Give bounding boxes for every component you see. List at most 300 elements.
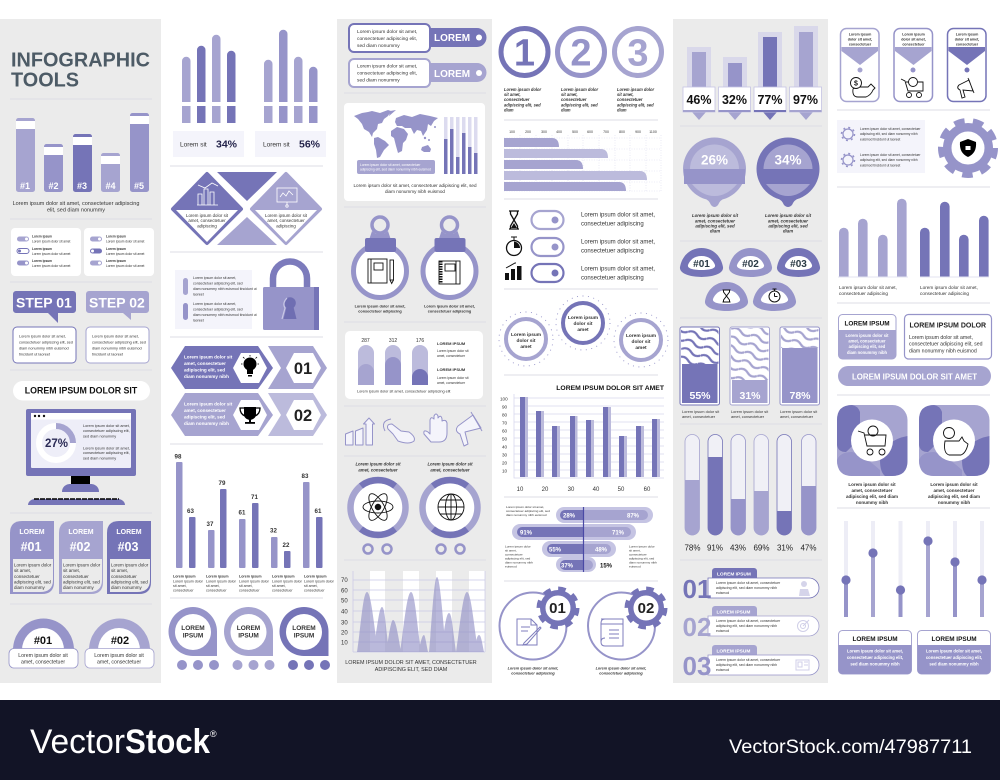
panel: toggle list right bbox=[84, 228, 154, 276]
text card with gears: Lorem ipsum dolor sit amet, consectetuer bbox=[860, 153, 921, 157]
list item 01: LOREM IPSUM bbox=[717, 572, 751, 578]
chart: vertical bars with heading: 60 bbox=[644, 487, 651, 493]
panel: three column chart bbox=[345, 331, 483, 399]
chart: horizontal bars: 800 bbox=[619, 130, 625, 134]
wave box 78%: 78% bbox=[789, 390, 811, 402]
card: lorem ipsum right: Lorem ipsum dolor sit amet, bbox=[926, 648, 982, 654]
balloon gauge 26% bbox=[683, 138, 746, 234]
list item 02 bbox=[682, 606, 819, 642]
tag card: shopping cart: Lorem ipsum bbox=[902, 32, 925, 36]
chart: horizontal bars bbox=[504, 130, 661, 191]
wave box 55%: 55% bbox=[689, 390, 711, 402]
icon: piggy coin bbox=[944, 428, 968, 455]
footer logo bbox=[30, 723, 217, 761]
wave box 78%: Lorem ipsum dolor sit bbox=[780, 409, 818, 414]
panel: toggle list left bbox=[11, 228, 81, 276]
label box 2 bbox=[349, 59, 486, 87]
percentage bars: 32% bbox=[722, 93, 747, 107]
card: lorem ipsum dolor: consectetuer adipiscing elit, sed bbox=[909, 342, 983, 348]
funnel chart bbox=[505, 505, 657, 572]
card: lorem ipsum small: amet, consectetuer bbox=[848, 338, 886, 344]
tag card: megaphone: consectetuer bbox=[956, 42, 979, 46]
text card with gears: adipiscing elit, sed diam nonummy nibh bbox=[860, 132, 918, 136]
numbered circles: adipiscing elit, sed bbox=[561, 102, 598, 108]
dotted circle labels: amet bbox=[635, 345, 647, 351]
icon: globe bbox=[438, 494, 464, 520]
funnel chart: 28% bbox=[563, 514, 576, 520]
tag card: megaphone bbox=[948, 28, 986, 102]
dotted circle labels: Lorem ipsum bbox=[626, 333, 656, 339]
clip badge: spiral notebook: Lorem ipsum dolor sit amet, bbox=[424, 304, 475, 308]
icon: presentation board bbox=[277, 188, 297, 207]
funnel chart: 87% bbox=[627, 514, 640, 520]
numbered circles: adipiscing elit, sed bbox=[617, 102, 654, 108]
panel: toggle list right: Lorem ipsum bbox=[106, 247, 126, 251]
panel: column 6 bbox=[837, 28, 995, 674]
wave box 31%: Lorem ipsum dolor sit bbox=[731, 409, 769, 414]
card: #03: Lorem ipsum dolor bbox=[111, 562, 149, 568]
icon: light bulb bbox=[241, 355, 259, 376]
list item 02: 02 bbox=[682, 612, 711, 642]
percentage bars: 46% bbox=[686, 93, 712, 107]
hexagon row 01: amet, consectetuer bbox=[184, 361, 226, 366]
numbered circles: diam bbox=[504, 108, 514, 112]
gear step 02: Lorem ipsum dolor sit amet, bbox=[596, 666, 646, 670]
title bbox=[11, 48, 150, 92]
monitor with donut: consectetuer adipiscing elit, bbox=[83, 429, 130, 433]
chart: grouped bars: 37 bbox=[207, 521, 214, 528]
callout: step 01 bbox=[13, 291, 76, 363]
donut: globe: Lorem ipsum dolor sit bbox=[427, 462, 473, 466]
panel: toggle list right: Lorem ipsum dolor sit amet bbox=[106, 240, 145, 244]
app tile: piggy: nonummy nibh bbox=[938, 500, 970, 505]
hexagon row 02: Lorem ipsum dolor sit bbox=[184, 402, 233, 406]
world map bbox=[354, 110, 438, 158]
card: #02: LOREM bbox=[68, 529, 94, 536]
clip badge: notebook and pencil: Lorem ipsum dolor sit amet, bbox=[355, 304, 405, 308]
app tile: piggy bbox=[919, 405, 990, 505]
text card beside padlock: consectetuer adipiscing elit, sed bbox=[193, 308, 243, 312]
chart: rounded bars dark: Lorem ipsum dolor sit amet, bbox=[920, 285, 978, 290]
funnel chart: diam nonummy nibh bbox=[505, 560, 533, 564]
funnel chart: 55% bbox=[549, 548, 562, 554]
chart: vertical bars with heading: 90 bbox=[502, 404, 508, 410]
chart: grouped bars: 71 bbox=[251, 494, 258, 501]
card: lorem ipsum small bbox=[838, 314, 896, 359]
balloon gauge 34% bbox=[756, 138, 820, 234]
balloon gauge 26%: 26% bbox=[701, 152, 728, 168]
text card beside padlock: Lorem ipsum dolor sit amet, bbox=[193, 276, 236, 280]
text card beside padlock: Lorem ipsum dolor sit amet, bbox=[193, 302, 236, 306]
callout: step 01: tincidunt ut laoreet bbox=[19, 352, 51, 356]
monitor with donut: consectetuer adipiscing elit, bbox=[83, 451, 130, 455]
diamond group: adipiscing bbox=[197, 224, 217, 228]
funnel chart: 71% bbox=[612, 530, 625, 536]
monitor with donut: sed diam nonummy bbox=[83, 456, 116, 460]
card: lorem ipsum right bbox=[918, 630, 990, 674]
gear step 01: consectetuer adipiscing bbox=[511, 672, 555, 676]
label box 2: LOREM bbox=[434, 69, 470, 80]
chart: cylinder bars bbox=[16, 113, 149, 192]
label box 1: consectetuer adipiscing elit, bbox=[357, 36, 417, 42]
card: lorem ipsum small: LOREM IPSUM bbox=[844, 320, 890, 328]
panel: three column chart: LOREM IPSUM bbox=[437, 367, 466, 372]
numbered circles: diam bbox=[561, 108, 571, 112]
chart: grouped bars: Lorem ipsum bbox=[206, 574, 229, 578]
card: #02 bbox=[59, 521, 103, 594]
chart: grouped bars: Lorem ipsum dolor bbox=[272, 580, 303, 584]
tag card: shopping cart bbox=[894, 28, 932, 102]
balloon gauge 34%: amet, consectetuer bbox=[768, 218, 808, 224]
monitor with donut: Lorem ipsum dolor sit amet, bbox=[83, 446, 130, 450]
donut: atom: Lorem ipsum dolor sit bbox=[355, 462, 401, 466]
chart: grouped bars: consectetuer bbox=[173, 588, 194, 592]
chart: grouped bars: Lorem ipsum dolor bbox=[206, 580, 237, 584]
wave box 31%: 31% bbox=[739, 390, 761, 402]
wave box 55% bbox=[680, 327, 720, 419]
numbered circles: sit amet, bbox=[561, 92, 578, 97]
funnel chart: sit amet, bbox=[505, 548, 517, 552]
list item 03: LOREM IPSUM bbox=[716, 648, 750, 654]
panel: toggle list right: Lorem ipsum bbox=[106, 259, 126, 263]
hexagon row 02: 02 bbox=[294, 407, 312, 425]
toggle row: growth bars: Lorem ipsum dolor sit amet, bbox=[581, 266, 655, 272]
list item 01 bbox=[682, 568, 819, 604]
dotted circle labels: dolor sit bbox=[632, 339, 651, 345]
wave box 78% bbox=[780, 327, 820, 419]
chart: grouped bars: Lorem ipsum bbox=[239, 574, 262, 578]
list item 01: 01 bbox=[682, 574, 711, 604]
chart: area peaks bbox=[341, 571, 485, 673]
icon: megaphone outline bbox=[958, 78, 974, 98]
text card beside padlock: consectetuer adipiscing elit, sed bbox=[193, 282, 243, 286]
funnel chart: diam nonummy nibh euismod bbox=[506, 513, 547, 517]
numbered circles: sit amet, bbox=[617, 92, 634, 97]
text block: diam nonummy nibh euismod bbox=[385, 189, 445, 194]
list item 03: adipiscing elit, sed diam nonummy nibh bbox=[716, 663, 777, 667]
chart: cylinder bars: #3 bbox=[77, 181, 87, 191]
text card beside padlock: diam nonummy nibh euismod tincidunt ut bbox=[193, 287, 257, 291]
numbered circles: consectetuer bbox=[617, 97, 643, 102]
funnel chart: consectetuer adipiscing elit, sed bbox=[506, 509, 550, 513]
chart: cylinder bars: #5 bbox=[134, 181, 144, 191]
card: lorem ipsum small: diam nonummy nibh bbox=[847, 350, 888, 355]
panel: column 1 bbox=[0, 19, 161, 683]
map label bbox=[357, 160, 435, 174]
icon: growth chart bbox=[197, 183, 218, 205]
callout: step 02: tincidunt ut laoreet bbox=[92, 352, 124, 356]
numbered circles: adipiscing elit, sed bbox=[504, 102, 541, 108]
chart: vertical bars with heading: 60 bbox=[502, 428, 508, 434]
toggle row: growth bars: consectetuer adipiscing bbox=[581, 276, 644, 282]
hexagon row 02: diam nonummy nibh bbox=[184, 421, 229, 426]
funnel chart: euismod bbox=[629, 564, 641, 568]
monitor with donut: sed diam nonummy bbox=[83, 434, 116, 438]
card: #01: consectetuer bbox=[14, 574, 40, 579]
arch badge: #01 bbox=[9, 619, 78, 668]
wave box 31%: amet, consectetuer bbox=[731, 414, 765, 419]
chart: vertical bars with heading: 30 bbox=[502, 452, 508, 458]
panel: toggle list left: Lorem ipsum dolor sit amet bbox=[32, 240, 71, 244]
toggle row: hourglass: Lorem ipsum dolor sit amet, bbox=[581, 212, 655, 218]
chart: rounded bars 34%: Lorem sit bbox=[180, 142, 207, 148]
dome badges: #03 bbox=[790, 259, 807, 270]
panel: toggle list left: Lorem ipsum dolor sit amet bbox=[32, 252, 71, 256]
arch badge: #02: #02 bbox=[111, 635, 129, 647]
hexagon row 01: diam nonummy nibh bbox=[184, 374, 229, 379]
chart: vertical bars with heading: 40 bbox=[502, 444, 508, 450]
list item 02: Lorem ipsum dolor sit amet, consectetuer bbox=[716, 619, 781, 623]
card: #02: diam nonummy bbox=[63, 585, 95, 590]
text card beside padlock: diam nonummy nibh euismod tincidunt ut bbox=[193, 313, 257, 317]
chart: area peaks: 40 bbox=[341, 610, 348, 616]
chart: area peaks: 60 bbox=[341, 588, 348, 594]
chart: grouped bars: Lorem ipsum bbox=[272, 574, 295, 578]
gear step 02: consectetuer adipiscing bbox=[599, 672, 643, 676]
dome badges: #02 bbox=[742, 259, 759, 270]
dotted circle labels: Lorem ipsum bbox=[568, 315, 598, 321]
wave box 55%: amet, consectetuer bbox=[682, 414, 716, 419]
chart: vertical bars with heading: LOREM IPSUM DOLOR SIT AMET bbox=[556, 385, 665, 392]
chart: rounded bars dark: consectetuer adipiscing bbox=[920, 291, 969, 296]
text card beside padlock: laoreet bbox=[193, 292, 204, 296]
dotted circle labels: Lorem ipsum bbox=[511, 332, 541, 338]
wave box 78%: amet, consectetuer bbox=[780, 414, 814, 419]
map pins with dots: LOREM bbox=[292, 625, 316, 632]
chart: grouped bars: sit amet, bbox=[304, 584, 318, 588]
numbered circles: sit amet, bbox=[504, 92, 521, 97]
chart: vertical bars with heading bbox=[500, 385, 665, 493]
panel: toggle list left: Lorem ipsum bbox=[32, 259, 52, 263]
chart: grouped bars: consectetuer bbox=[272, 588, 293, 592]
chart: grouped bars: 22 bbox=[283, 542, 290, 549]
tube gauges: 31% bbox=[777, 544, 793, 552]
funnel chart: Lorem ipsum dolor bbox=[629, 544, 655, 548]
arch badge: #02 bbox=[85, 619, 154, 668]
panel: toggle list right: Lorem ipsum dolor sit amet bbox=[106, 252, 145, 256]
icon: atom bbox=[363, 491, 393, 523]
panel: three column chart: 176 bbox=[416, 338, 424, 344]
diamond group: amet, consectetuer bbox=[267, 218, 305, 223]
arch badge: #02: amet, consectetuer bbox=[97, 660, 141, 666]
app tile: piggy: Lorem ipsum dolor sit bbox=[930, 482, 978, 487]
banner pill: LOREM IPSUM DOLOR SIT AMET bbox=[852, 372, 977, 382]
map pins with dots: LOREM bbox=[181, 625, 205, 632]
chart: horizontal bars: 400 bbox=[556, 130, 562, 134]
app tile: cart: amet, consectetuer bbox=[851, 488, 893, 493]
dotted circle labels: amet bbox=[577, 327, 589, 333]
chart: vertical bars with heading: 10 bbox=[517, 487, 524, 493]
chart: grouped bars: consectetuer bbox=[239, 588, 260, 592]
chart: grouped bars: 61 bbox=[315, 508, 322, 515]
chart: area peaks: LOREM IPSUM DOLOR SIT AMET, CONSECTETUER bbox=[345, 660, 477, 666]
gear step 01: Lorem ipsum dolor sit amet, bbox=[508, 666, 558, 670]
text card with gears bbox=[837, 120, 925, 173]
chart: rounded bars dark bbox=[920, 202, 989, 296]
card: #03: adipiscing elit, sed bbox=[111, 580, 148, 584]
card: lorem ipsum right: LOREM IPSUM bbox=[931, 636, 977, 643]
chart: grouped bars: sit amet, bbox=[239, 584, 253, 588]
diamond group bbox=[173, 172, 320, 245]
chart: area peaks: 10 bbox=[341, 640, 348, 646]
tag card: piggy bank: Lorem ipsum bbox=[849, 32, 871, 36]
panel: toggle list left: Lorem ipsum bbox=[32, 234, 52, 238]
list item 03: 03 bbox=[682, 651, 711, 681]
footer logo: Vector bbox=[30, 723, 125, 761]
card: lorem ipsum left: LOREM IPSUM bbox=[852, 636, 898, 643]
callout: step 01: STEP 01 bbox=[16, 294, 72, 310]
map pins with dots: LOREM bbox=[237, 625, 260, 632]
balloon gauge 34%: 34% bbox=[774, 152, 802, 168]
funnel chart: euismod bbox=[505, 564, 517, 568]
card: #02: consectetuer bbox=[63, 574, 89, 579]
chart: horizontal bars: 1100 bbox=[649, 130, 657, 134]
chart: area peaks: 70 bbox=[341, 578, 348, 584]
funnel chart: consectetuer bbox=[505, 552, 523, 556]
app tile: cart: nonummy nibh bbox=[856, 500, 888, 505]
card: lorem ipsum dolor: diam nonummy nibh euismod bbox=[909, 348, 977, 354]
text block: chart caption bbox=[13, 201, 139, 214]
hexagon row 02: amet, consectetuer bbox=[184, 408, 226, 413]
numbered circles: consectetuer bbox=[561, 97, 587, 102]
dome badges: #01 bbox=[693, 259, 710, 270]
map pins with dots: IPSUM bbox=[238, 632, 259, 640]
text card with gears: Lorem ipsum dolor sit amet, consectetuer bbox=[860, 127, 921, 131]
panel: column 3 bbox=[337, 19, 492, 683]
funnel chart: consectetuer bbox=[629, 552, 647, 556]
balloon gauge 26%: Lorem ipsum dolor sit bbox=[692, 213, 739, 218]
card: lorem ipsum dolor: LOREM IPSUM DOLOR bbox=[910, 322, 986, 330]
chart: grouped bars: 98 bbox=[175, 454, 182, 460]
chart: grouped bars: Lorem ipsum bbox=[304, 574, 327, 578]
list item 03: euismod bbox=[716, 668, 729, 672]
label box 1: LOREM bbox=[434, 33, 470, 44]
chart: grouped bars: sit amet, bbox=[173, 584, 187, 588]
heading pill bbox=[13, 381, 150, 400]
card: lorem ipsum small: Lorem ipsum dolor sit bbox=[846, 333, 889, 338]
balloon gauge 26%: adipiscing elit, sed bbox=[695, 224, 735, 228]
chart: rounded bars 56% bbox=[255, 30, 326, 157]
numbered circles: 3 bbox=[627, 32, 649, 74]
card: lorem ipsum small: adipiscing elit, sed bbox=[849, 344, 886, 349]
chart: rounded bars 34%: 34% bbox=[216, 138, 238, 150]
funnel chart: Lorem ipsum dolor bbox=[505, 544, 531, 548]
chart: rounded bars light bbox=[838, 199, 908, 296]
chart: grouped bars: Lorem ipsum dolor bbox=[304, 580, 335, 584]
card: lorem ipsum right: consectetuer adipiscing elit, bbox=[926, 655, 982, 660]
chart: grouped bars: consectetuer bbox=[206, 588, 227, 592]
numbered circles: Lorem ipsum dolor bbox=[617, 87, 654, 92]
card: lorem ipsum left: sed diam nonummy nibh bbox=[850, 662, 900, 666]
hexagon row 01: Lorem ipsum dolor sit bbox=[184, 354, 233, 360]
funnel chart: sit amet, bbox=[629, 548, 641, 552]
card: #02: adipiscing elit, sed bbox=[63, 580, 100, 584]
app tile: piggy: amet, consectetuer bbox=[933, 488, 975, 493]
panel: three column chart: 312 bbox=[389, 338, 397, 344]
funnel chart: 91% bbox=[520, 530, 533, 536]
text block: chart caption: Lorem ipsum dolor sit amet, consectetuer adipiscing bbox=[13, 201, 139, 207]
numbered circles: 2 bbox=[570, 32, 592, 74]
donut: globe bbox=[422, 462, 478, 554]
funnel chart: adipiscing elit, sed bbox=[629, 556, 655, 560]
donut: atom: amet, consectetuer bbox=[358, 468, 398, 472]
list item 02: LOREM IPSUM bbox=[716, 610, 750, 616]
icon: shield gear bbox=[941, 121, 995, 175]
card: lorem ipsum dolor: Lorem ipsum dolor sit amet, bbox=[909, 335, 973, 341]
chart: vertical bars with heading: 40 bbox=[593, 487, 600, 493]
funnel chart: adipiscing elit, sed bbox=[505, 556, 531, 560]
list item 03: Lorem ipsum dolor sit amet, consectetuer bbox=[716, 658, 781, 662]
toggle row: hourglass bbox=[509, 211, 655, 229]
tube gauges bbox=[684, 434, 817, 552]
sliders bbox=[841, 521, 987, 617]
card: lorem ipsum left: Lorem ipsum dolor sit amet, bbox=[847, 648, 903, 654]
arch badge: #01: amet, consectetuer bbox=[21, 660, 65, 666]
wave box 55%: Lorem ipsum dolor sit bbox=[682, 409, 720, 414]
callout: step 02: STEP 02 bbox=[89, 294, 145, 310]
numbered circles: 1 bbox=[514, 32, 535, 74]
card: #01: LOREM bbox=[19, 529, 45, 536]
callout: step 01: Lorem ipsum dolor sit amet, bbox=[19, 334, 66, 338]
card: #03: LOREM bbox=[116, 529, 142, 536]
card: lorem ipsum left: consectetuer adipiscing elit, bbox=[847, 655, 903, 660]
list item 03 bbox=[682, 645, 819, 681]
numbered circles: consectetuer bbox=[504, 97, 530, 102]
card: #03: diam nonummy bbox=[111, 585, 143, 590]
text card with gears: adipiscing elit, sed diam nonummy nibh bbox=[860, 158, 918, 162]
arch badge: #02: Lorem ipsum dolor sit bbox=[94, 653, 144, 659]
panel: three column chart: 287 bbox=[361, 338, 370, 344]
text card beside padlock bbox=[175, 270, 257, 329]
percentage bars: 97% bbox=[793, 93, 818, 107]
callout: step 01: diam nonummy nibh euismod bbox=[19, 346, 69, 350]
chart: horizontal bars: 100 bbox=[509, 130, 515, 134]
chart: grouped bars: Lorem ipsum dolor bbox=[239, 580, 270, 584]
chart: vertical bars with heading: 50 bbox=[502, 436, 508, 442]
diamond group: Lorem ipsum dolor sit bbox=[265, 213, 308, 218]
list item 01: adipiscing elit, sed diam nonummy nibh bbox=[716, 586, 777, 590]
funnel chart: diam nonummy nibh bbox=[629, 560, 657, 564]
percentage bars bbox=[683, 26, 822, 120]
dotted circle labels: dolor sit bbox=[574, 321, 593, 327]
arch badge: #01: #01 bbox=[34, 635, 52, 647]
chart: area peaks: ADIPISCING ELIT, SED DIAM bbox=[375, 667, 448, 673]
panel: column 4 bbox=[499, 28, 668, 676]
card: #03: #03 bbox=[118, 540, 138, 554]
numbered circles bbox=[501, 28, 662, 112]
chart: vertical bars with heading: 80 bbox=[502, 412, 508, 418]
clip badge: notebook and pencil bbox=[354, 217, 406, 314]
chart: rounded bars 56%: 56% bbox=[299, 138, 321, 150]
icon: book bbox=[601, 619, 623, 646]
callout: step 02: diam nonummy nibh euismod bbox=[92, 346, 142, 350]
icon: cart bbox=[901, 78, 923, 98]
tube gauges: 69% bbox=[753, 544, 770, 552]
tag card: shopping cart: dolor sit amet, bbox=[901, 38, 926, 42]
panel: toggle list left: Lorem ipsum bbox=[32, 247, 52, 251]
chart: cylinder bars: #2 bbox=[48, 181, 59, 191]
balloon gauge 34%: adipiscing elit, sed bbox=[768, 224, 808, 228]
chart: vertical bars with heading: 20 bbox=[502, 460, 508, 466]
chart: vertical bars with heading: 50 bbox=[618, 487, 625, 493]
chart: grouped bars: Lorem ipsum bbox=[173, 574, 196, 578]
dotted circle labels bbox=[499, 296, 668, 367]
title: TOOLS bbox=[11, 68, 79, 92]
tube gauges: 91% bbox=[707, 544, 723, 552]
dotted circle labels: amet bbox=[520, 344, 532, 350]
icon: trophy bbox=[240, 407, 260, 424]
list item 02: adipiscing elit, sed diam nonummy nibh bbox=[716, 624, 777, 628]
